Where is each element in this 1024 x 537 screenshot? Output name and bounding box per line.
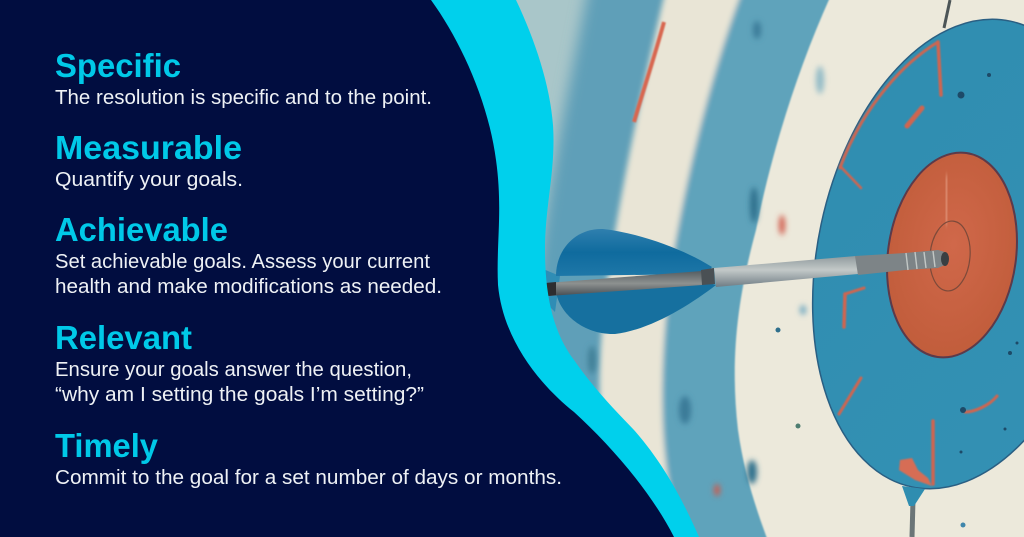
arrow [543,229,949,334]
shaft band [701,268,715,285]
nock [545,282,556,296]
cyan wave band [400,0,699,537]
description: Specific: The resolution is specific and to the point. [55,87,432,109]
description: Timely: Commit to the goal for a set number of days or months. [55,467,562,489]
heading: Timely: Timely [55,427,159,464]
photo: archery target [500,0,1024,537]
description: Relevant: “why am I setting the goals I’m setting?” [55,384,424,406]
tip ridges [906,251,935,270]
tip point [941,252,949,266]
arrow tip [855,250,947,275]
blue paint drip [902,486,925,506]
description: Relevant [55,359,424,406]
holes and dots [958,73,1018,454]
upper fletching [556,229,712,276]
description: Achievable: health and make modifications as needed. [55,276,442,298]
description: Achievable: Set achievable goals. Assess your current [55,251,430,273]
heading: Specific: Specific [55,47,181,84]
red bullseye [874,144,1024,366]
target pin bottom [912,500,913,537]
bullseye highlight [946,175,947,225]
paint chip splat [899,458,932,486]
item: Measurable [55,129,243,191]
item: Relevant [55,319,424,406]
blue disk [772,0,1024,517]
blurred red streak [634,22,664,122]
red paint marks on disk [839,42,997,484]
description: Measurable: Quantify your goals. [55,169,243,191]
description: Achievable [55,251,442,298]
rear fin [543,269,560,312]
heading: Achievable: Achievable [55,211,228,248]
item: Achievable [55,211,442,298]
heading: Relevant: Relevant [55,319,192,356]
heading: Measurable: Measurable [55,129,242,166]
blurred speckles [588,21,824,496]
item: Timely [55,427,562,489]
description: Relevant: Ensure your goals answer the question, [55,359,412,381]
silver shaft [714,256,858,287]
navy panel [0,0,674,537]
inner ring [927,219,973,293]
target pin top [944,0,950,28]
item: Specific [55,47,432,109]
rear shaft [546,271,702,296]
lower fletching [556,282,716,334]
